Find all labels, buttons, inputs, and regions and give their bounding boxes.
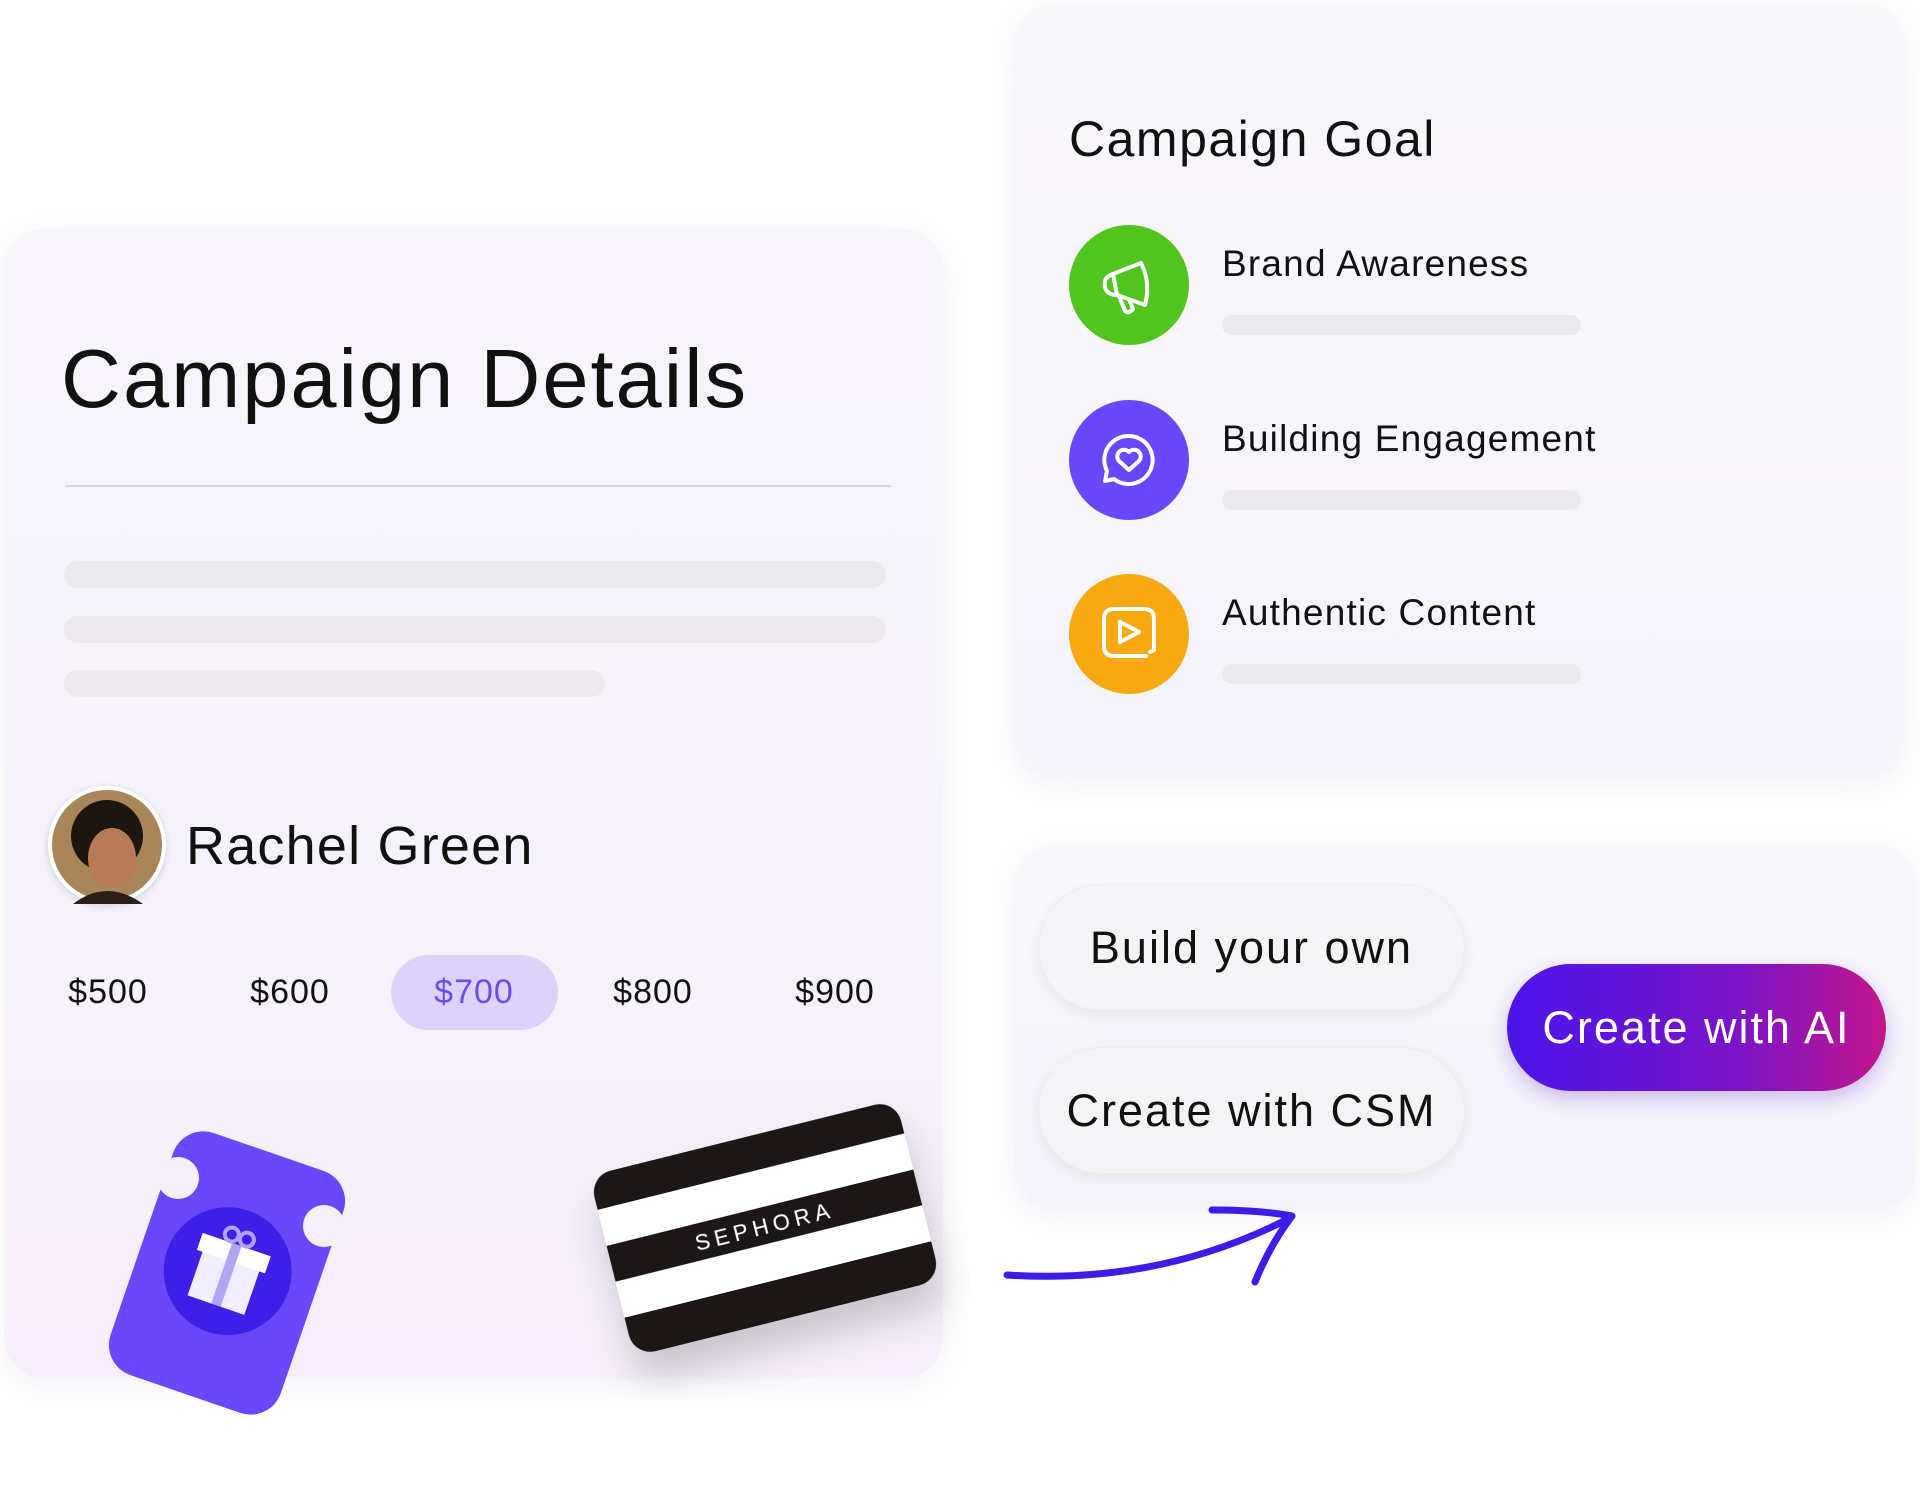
selected price pill [391, 955, 558, 1030]
price selector: $500 [68, 973, 148, 1011]
panel: campaign goal [1015, 4, 1904, 779]
button: Build your own: Build your own [1090, 922, 1413, 972]
goal: authentic content [1069, 574, 1581, 694]
icon: sephora gift card: SEPHORA [692, 1197, 837, 1256]
icon: megaphone [1069, 225, 1189, 345]
panel: creation options [1015, 845, 1916, 1210]
button: Create with AI: Create with AI [1542, 1002, 1851, 1052]
button: Create with CSM [1038, 1047, 1465, 1174]
icon: purple gift card [108, 1131, 346, 1415]
price selector: $700 [434, 973, 514, 1011]
button: Build your own [1038, 884, 1465, 1011]
price selector: $800 [613, 973, 693, 1011]
icon: video play [1069, 574, 1189, 694]
button: Create with AI [1507, 964, 1886, 1091]
icon: chat heart [1069, 400, 1189, 520]
panel: campaign details [4, 229, 943, 1378]
price selector: $600 [250, 973, 330, 1011]
price selector [68, 955, 875, 1030]
goal: authentic content: Authentic Content [1222, 592, 1537, 633]
heading: Campaign Details: Campaign Details [61, 332, 748, 425]
name: Rachel Green: Rachel Green [186, 816, 534, 876]
goal: building engagement [1069, 400, 1597, 520]
avatar [48, 786, 166, 904]
arrow [1004, 1206, 1296, 1286]
placeholder text lines [64, 561, 886, 697]
button: Create with CSM: Create with CSM [1066, 1084, 1437, 1136]
goal: building engagement: Building Engagement [1222, 418, 1597, 459]
goal: brand awareness: Brand Awareness [1222, 243, 1529, 284]
goal: brand awareness [1069, 225, 1581, 345]
heading: Campaign Goal: Campaign Goal [1069, 111, 1436, 167]
icon: sephora gift card [588, 1104, 954, 1388]
price selector: $900 [795, 973, 875, 1011]
